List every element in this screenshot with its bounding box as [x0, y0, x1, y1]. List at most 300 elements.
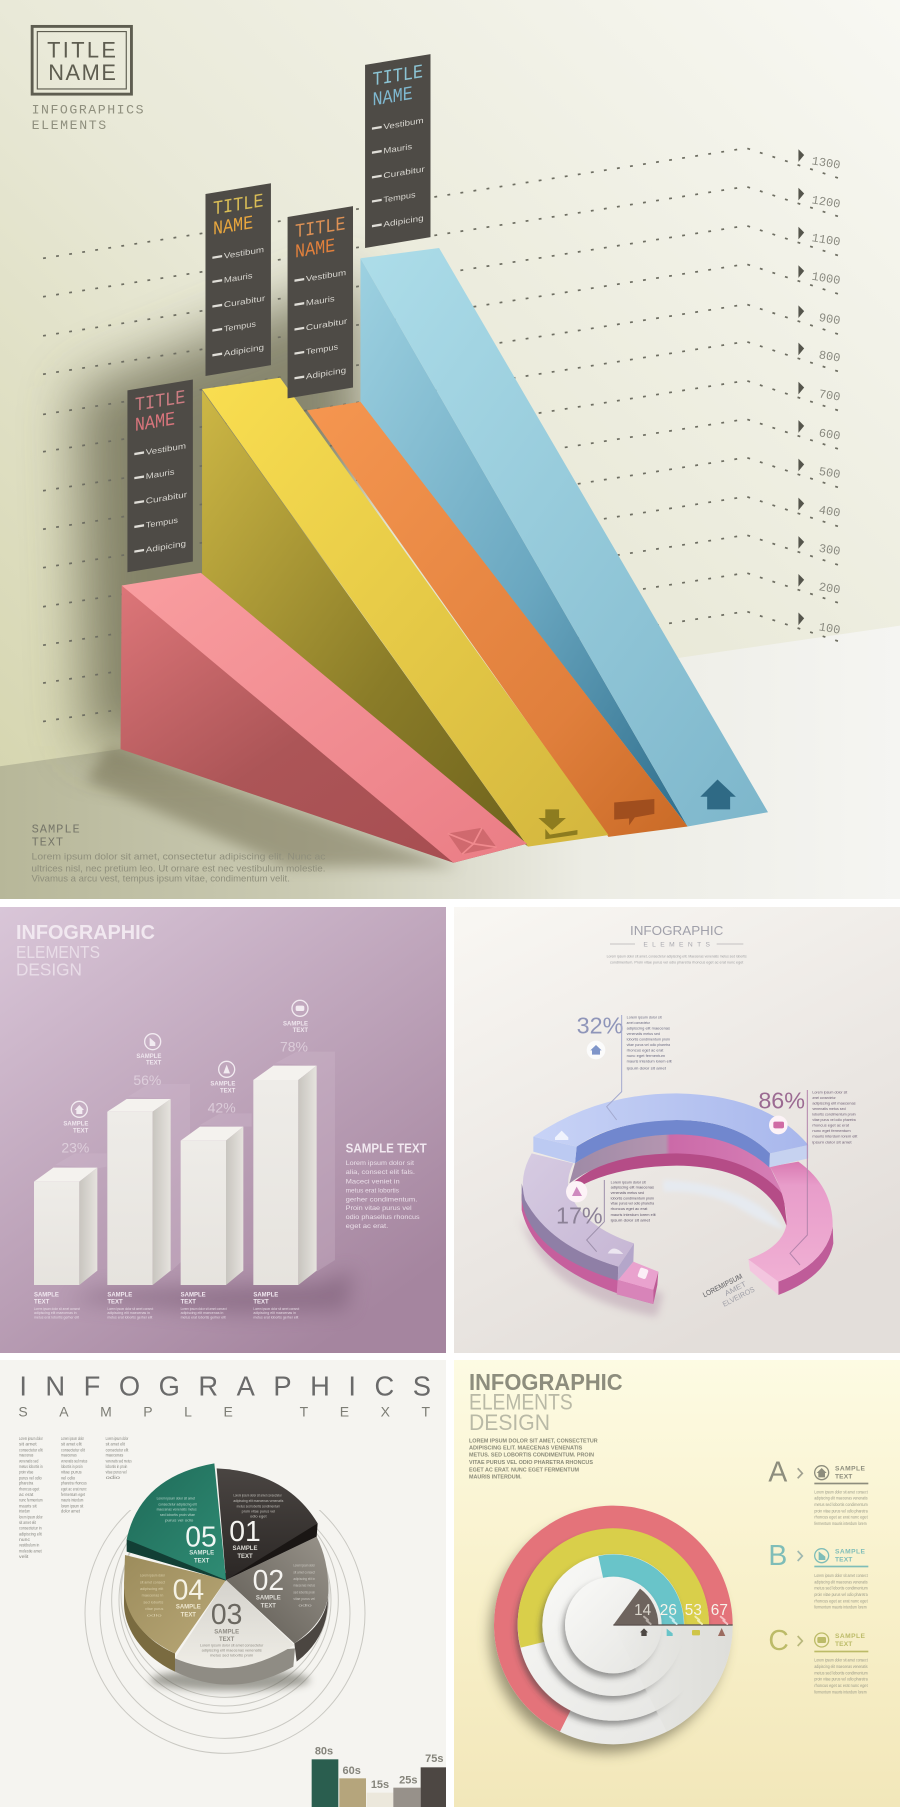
- text columns: maecenas: [61, 1453, 77, 1458]
- small bar chart: 25s: [399, 1774, 417, 1786]
- pink segment: [748, 1162, 833, 1295]
- callout: 32%: rhoncus eget ac erat: [627, 1047, 664, 1052]
- callout: 32%: venenatis metus sed: [627, 1031, 660, 1036]
- callout: 78%: [280, 1000, 308, 1055]
- tag: orange list: Tempus: [306, 342, 338, 357]
- legend B: B: [768, 1540, 787, 1572]
- bar captions: [34, 1293, 299, 1320]
- tag: yellow list: TITLE: [213, 190, 263, 221]
- callout: 86%: nunc eget fermentum: [812, 1128, 851, 1133]
- scale arrows: [798, 149, 804, 625]
- legend C: Lorem ipsum dolor sit amet consect: [814, 1658, 868, 1663]
- intro paragraph: VITAE PURUS VEL ODIO PHARETRA RHONCUS: [469, 1460, 593, 1466]
- bar captions: TEXT: [34, 1300, 50, 1306]
- rotated label: LOREMIPSUM: [701, 1272, 744, 1299]
- heading: [18, 1371, 431, 1420]
- intro paragraph: [469, 1439, 598, 1481]
- tag: red list: TITLE: [135, 387, 185, 417]
- lilac segment: [523, 1153, 634, 1281]
- callout: 32%: nunc eget fermentum: [627, 1053, 666, 1058]
- text columns: consectetur elit: [61, 1447, 86, 1452]
- inner wall: [568, 1150, 787, 1228]
- ring shadow: [520, 1217, 663, 1317]
- legend C: fermentum mauris interdum lorem: [814, 1689, 867, 1694]
- tag: yellow list: [205, 183, 271, 376]
- slice 02: maecenas metus: [293, 1584, 315, 1588]
- icon: note on pink end: [637, 1267, 649, 1280]
- lilac side: [522, 1183, 618, 1281]
- tag: yellow list: Curabitur: [224, 294, 266, 309]
- icon: home: [700, 779, 736, 809]
- panel: 3D ring chart: [454, 907, 900, 1353]
- bar 56%: [107, 1099, 171, 1285]
- slice 03: 03: [211, 1599, 242, 1631]
- text columns: lobortis in proin: [106, 1464, 128, 1469]
- text columns: velit: [19, 1554, 29, 1559]
- subtitle: INFOGRAPHICS: [32, 103, 144, 118]
- legend A: rhoncus eget ac erat nunc eget: [814, 1515, 868, 1520]
- text columns: [19, 1436, 132, 1559]
- sample text block: TEXT: [32, 836, 63, 850]
- callout: 86%: 86%: [758, 1087, 805, 1113]
- sample text side note: odio phasellus rhoncus: [346, 1214, 420, 1221]
- scale labels: 400: [818, 503, 841, 521]
- slice 05: [127, 1463, 226, 1581]
- icon: download: [538, 809, 577, 839]
- legend A: fermentum mauris interdum lorem: [814, 1521, 867, 1526]
- values: 67: [711, 1602, 728, 1619]
- sample text side note: gerher condimentum.: [346, 1196, 417, 1203]
- heading: ELEMENTS: [16, 942, 100, 962]
- callout: 78%: 78%: [280, 1039, 308, 1055]
- scale labels: 900: [818, 311, 841, 328]
- callout: 86%: venenatis metus sed: [812, 1106, 846, 1111]
- callout: 23%: TEXT: [73, 1128, 89, 1134]
- concentric rings: [85, 1473, 365, 1753]
- values: 26: [660, 1602, 677, 1619]
- slice 05: 05: [185, 1522, 217, 1554]
- scale labels: 600: [818, 426, 841, 444]
- callout: 17%: 17%: [556, 1202, 603, 1228]
- tag: red list: Adipicing: [146, 539, 186, 555]
- text columns: maecenas: [106, 1453, 123, 1458]
- layered discs chart: [490, 1506, 733, 1752]
- slice 05: TEXT: [194, 1559, 210, 1565]
- intro paragraph: ADIPISCING ELIT. MAECENAS VENENATIS: [469, 1446, 583, 1452]
- scale labels: 1200: [811, 193, 841, 212]
- values: 53: [685, 1602, 702, 1619]
- icon: envelope: [448, 828, 497, 854]
- slice 05: Lorem ipsum dolor sit amet: [157, 1497, 195, 1501]
- callout: 32%: mauris interdum lorem elit: [627, 1058, 673, 1063]
- bar captions: adipiscing elit maecenas in: [181, 1311, 223, 1315]
- text columns: consectetur elit: [106, 1447, 129, 1452]
- text columns: sit amet elit: [19, 1520, 37, 1525]
- legend A: adipiscing elit maecenas venenatis: [814, 1496, 868, 1501]
- tag: red list: Vestibum: [146, 441, 186, 457]
- slice 04: vitae purus: [145, 1607, 164, 1611]
- tag: blue list: Mauris: [383, 142, 412, 156]
- bar captions: SAMPLE: [253, 1293, 278, 1299]
- scale labels: 1000: [811, 270, 841, 288]
- callout: 17%: lobortis condimentum proin: [611, 1195, 654, 1200]
- text columns: venenatis sed metus: [106, 1458, 132, 1463]
- callout: 78%: TEXT: [293, 1028, 308, 1034]
- heading: INFOGRAPHIC: [16, 922, 155, 944]
- callout: 86%: [758, 1087, 858, 1265]
- sample text side note: metus erat lobortis: [346, 1187, 400, 1194]
- slice 01: SAMPLE: [233, 1546, 257, 1552]
- heading: DESIGN: [16, 959, 82, 979]
- text columns: consectetur in: [19, 1526, 42, 1531]
- slice 05: consectetur adipiscing elit: [158, 1502, 197, 1506]
- slice 05: SAMPLE: [189, 1551, 214, 1557]
- subtitle: ELEMENTS: [32, 118, 106, 133]
- legend A: TEXT: [835, 1473, 852, 1480]
- slice 04: adipiscing elit: [140, 1587, 163, 1591]
- legend C: proin vitae purus vel odio pharetra: [814, 1677, 868, 1682]
- slice 01: Lorem ipsum dolor sit amet consectetur: [233, 1494, 282, 1498]
- heading: [17, 925, 154, 976]
- tag: red list: NAME: [135, 408, 175, 437]
- pie shadow: [150, 1669, 310, 1691]
- sample text side note: alia, consect elit fals.: [346, 1169, 415, 1176]
- bar captions: adipiscing elit maecenas in: [34, 1311, 77, 1315]
- text columns: venenatis sed: [19, 1458, 39, 1463]
- callout: 23%: [61, 1101, 89, 1155]
- legend C: [768, 1625, 868, 1694]
- tag: blue list: TITLE: [373, 61, 423, 91]
- icon: document: [667, 1629, 673, 1636]
- panel: 3D wedge bar chart: [0, 0, 900, 900]
- callout: 17%: vitae purus vel odio pharetra: [611, 1201, 655, 1206]
- slice 05: purus vel odio: [165, 1518, 193, 1522]
- icon: home: [640, 1628, 648, 1636]
- legend B: proin vitae purus vel odio pharetra: [814, 1592, 868, 1597]
- tag: orange list: Adipicing: [306, 366, 346, 381]
- callout: 86%: ipsum dolor sit amet: [812, 1140, 853, 1145]
- callout: 32%: [577, 1012, 673, 1120]
- slice 02: Lorem ipsum dolor: [293, 1564, 316, 1568]
- slice 04: sit amet consect: [140, 1580, 165, 1584]
- sample text side note: [346, 1141, 427, 1230]
- sample text block: [32, 822, 326, 884]
- value ticks: [644, 1617, 727, 1624]
- slice 01: TEXT: [237, 1554, 253, 1560]
- slice 05: maecenas venenatis metus: [157, 1508, 197, 1512]
- bar 23%: [34, 1168, 97, 1285]
- scale labels: 800: [818, 348, 841, 366]
- slice 01: 01: [229, 1516, 261, 1548]
- values: [634, 1602, 728, 1619]
- text columns: sit amet elit: [61, 1442, 82, 1447]
- dotted scale lines: [43, 148, 838, 722]
- callout: 86%: mauris interdum lorem elit: [812, 1133, 858, 1138]
- callout: 32%: vitae purus vel odio pharetra: [627, 1042, 671, 1047]
- text columns: odio: [106, 1475, 121, 1480]
- heading: DESIGN: [469, 1410, 550, 1435]
- text columns: Lorem ipsum dolor: [106, 1436, 129, 1441]
- bar captions: Lorem ipsum dolor sit amet consect: [107, 1307, 153, 1311]
- bar captions: metus erat lobortis gerher elit: [253, 1316, 298, 1320]
- slice 04: Lorem ipsum dolor: [140, 1574, 166, 1578]
- text columns: proin vitae: [19, 1470, 34, 1475]
- slice 04: 04: [173, 1574, 204, 1606]
- callout: 23%: 23%: [61, 1139, 89, 1155]
- tag: blue list: NAME: [373, 83, 413, 111]
- scale labels: 1100: [811, 231, 841, 250]
- callout: 17%: rhoncus eget ac erat: [611, 1206, 648, 1211]
- scale labels: 100: [818, 620, 841, 638]
- bar captions: metus erat lobortis gerher elit: [107, 1316, 152, 1320]
- slice 03: adipiscing elit maecenas venenatis: [202, 1649, 262, 1653]
- scale labels: 700: [818, 387, 841, 405]
- tag: blue list: Tempus: [383, 190, 416, 204]
- slice 03: Lorem ipsum dolor sit amet consectetur: [200, 1644, 264, 1648]
- callout: 86%: amet consectetur: [812, 1095, 836, 1100]
- slice 03: TEXT: [219, 1637, 235, 1643]
- slice 02: odio: [298, 1604, 312, 1608]
- text columns: nunc fermentum: [19, 1498, 43, 1503]
- slice 02: vitae purus vel: [293, 1597, 315, 1601]
- text columns: sit amet: [19, 1442, 38, 1447]
- intro paragraph: EGET AC ERAT. NUNC EGET FERMENTUM: [469, 1467, 579, 1473]
- tag: yellow list: Adipicing: [224, 343, 264, 358]
- bar captions: metus erat lobortis gerher elit: [181, 1316, 226, 1320]
- sample text side note: Lorem ipsum dolor sit: [346, 1160, 414, 1167]
- bar captions: Lorem ipsum dolor sit amet consect: [181, 1307, 227, 1311]
- text columns: vitae purus vel: [106, 1470, 127, 1475]
- callout: 56%: TEXT: [146, 1061, 162, 1067]
- callout: 17%: venenatis metus sed: [611, 1190, 644, 1195]
- legend C: C: [768, 1625, 789, 1657]
- bar captions: adipiscing elit maecenas in: [107, 1311, 150, 1315]
- pink mid band: [569, 1133, 783, 1195]
- legend A: metus sed lobortis condimentum: [814, 1502, 868, 1507]
- slice 01: proin vitae purus vel: [242, 1510, 275, 1514]
- callout: 17%: ipsum dolor sit amet: [611, 1218, 651, 1223]
- legend A: Lorem ipsum dolor sit amet consect: [814, 1489, 868, 1494]
- scale labels: 1300: [811, 154, 841, 173]
- callout: 86%: rhoncus eget ac erat: [812, 1122, 850, 1127]
- callout: 42%: SAMPLE: [210, 1082, 235, 1088]
- text columns: pharetra rhoncus: [61, 1481, 87, 1486]
- heading: condimentum. Proin vitae purus vel odio pharetra rhoncus eget ac erat nunc eget: [610, 960, 743, 964]
- text columns: eget ac erat nunc: [61, 1486, 87, 1491]
- text columns: lorem ipsum dolor: [19, 1514, 43, 1519]
- slice 05: sed lobortis proin vitae: [160, 1513, 195, 1517]
- slice 04: [124, 1555, 226, 1672]
- callout: 86%: lobortis condimentum proin: [812, 1111, 856, 1116]
- slice 02: adipiscing elit in: [293, 1577, 315, 1581]
- text columns: mauris interdum: [61, 1498, 84, 1503]
- small bar chart: 80s: [315, 1746, 333, 1758]
- text columns: nunc: [19, 1537, 31, 1542]
- small bar chart: 15s: [371, 1779, 389, 1791]
- tag: red list: Tempus: [146, 516, 178, 530]
- pink wedge: [121, 573, 527, 863]
- slice 03: metus sed lobortis proin: [210, 1654, 253, 1658]
- text columns: molestie amet: [19, 1548, 42, 1553]
- sample text block: SAMPLE: [32, 822, 80, 836]
- tag: orange list: Curabitur: [306, 317, 348, 332]
- sample text block: Vivamus a arcu vest, tempus ipsum vitae, condimentum velit.: [32, 874, 290, 884]
- callout: 17%: Lorem ipsum dolor sit: [611, 1179, 646, 1184]
- rotated label: AMET: [723, 1279, 748, 1298]
- heading: ELEMENTS: [643, 942, 711, 949]
- heading: INFOGRAPHICS: [19, 1371, 431, 1402]
- bar captions: TEXT: [253, 1300, 269, 1306]
- scale labels: [812, 157, 840, 634]
- slice 04: maecenas in: [142, 1594, 163, 1598]
- scale labels: 500: [818, 465, 841, 482]
- slice 04: TEXT: [181, 1613, 196, 1619]
- callout: 56%: 56%: [133, 1072, 161, 1088]
- panel: concentric semicircle chart: [454, 1360, 900, 1807]
- heading: Lorem ipsum dolor sit amet, consectetur adipiscing elit. Maecenas venenatis metus sed lobortis: [607, 954, 747, 958]
- slice 02: TEXT: [261, 1603, 276, 1609]
- small bar chart: [312, 1746, 447, 1807]
- heading: INFOGRAPHIC: [630, 923, 724, 938]
- callout: 56%: [133, 1034, 162, 1088]
- legend B: SAMPLE: [835, 1548, 866, 1555]
- tag: yellow list: NAME: [213, 212, 253, 241]
- scale labels: 300: [818, 542, 841, 559]
- bar captions: SAMPLE: [34, 1293, 59, 1299]
- intro paragraph: METUS. SED LOBORTIS CONDIMENTUM. PROIN: [469, 1453, 594, 1459]
- tag: blue list: Adipicing: [383, 214, 424, 229]
- panel: white 3D bars on purple: [0, 907, 446, 1353]
- pink bottom ring left: [522, 1193, 658, 1304]
- text columns: venenatis sed metus: [61, 1458, 87, 1463]
- text columns: vitae purus: [61, 1470, 82, 1475]
- callout: 17%: adipiscing elit maecenas: [611, 1185, 654, 1190]
- legend B: TEXT: [835, 1556, 852, 1563]
- callout: 32%: ipsum dolor sit amet: [627, 1065, 667, 1070]
- slice 01: odio eget: [250, 1514, 267, 1518]
- legend A: [768, 1457, 868, 1526]
- text columns: adipiscing elit: [19, 1531, 42, 1536]
- tag: blue list: [365, 54, 430, 248]
- sample text side note: Proin vitae purus vel: [346, 1205, 412, 1212]
- bar captions: Lorem ipsum dolor sit amet consect: [253, 1307, 299, 1311]
- legend B: metus sed lobortis condimentum: [814, 1586, 868, 1591]
- callout: 86%: vitae purus vel odio pharetra: [812, 1117, 856, 1122]
- bar captions: TEXT: [107, 1300, 123, 1306]
- callout: 23%: SAMPLE: [63, 1122, 88, 1128]
- text columns: Lorem ipsum dolor: [61, 1436, 84, 1441]
- tag: blue list: Curabitur: [383, 165, 425, 180]
- tag: orange list: Mauris: [306, 294, 335, 308]
- tag: red list: Mauris: [146, 467, 174, 481]
- slice 01: metus sed lobortis condimentum: [237, 1504, 280, 1508]
- sample text block: Lorem ipsum dolor sit amet, consectetur adipiscing elit. Nunc ac: [32, 851, 326, 861]
- callout: 17%: [556, 1179, 657, 1252]
- callout: 32%: lobortis condimentum proin: [627, 1036, 670, 1041]
- bar captions: Lorem ipsum dolor sit amet consect: [34, 1307, 80, 1311]
- text columns: rhoncus eget: [19, 1486, 40, 1491]
- slice 04: sed lobortis: [143, 1600, 164, 1604]
- callout: 32%: Lorem ipsum dolor sit: [627, 1014, 662, 1019]
- values: 14: [634, 1602, 652, 1619]
- legend C: SAMPLE: [835, 1633, 866, 1640]
- text columns: vestibulum in: [19, 1543, 40, 1548]
- heading: INFOGRAPHIC: [469, 1369, 623, 1395]
- callout: 42%: TEXT: [220, 1088, 236, 1094]
- slice 04: odio: [147, 1614, 162, 1618]
- tag: red list: [127, 380, 193, 572]
- tag: blue list: Vestibum: [383, 116, 424, 132]
- legend C: rhoncus eget ac erat nunc eget: [814, 1683, 868, 1688]
- intro paragraph: MAURIS INTERDUM.: [469, 1475, 522, 1481]
- slice 02: sed lobortis proin: [293, 1590, 315, 1594]
- text columns: lobortis in proin: [61, 1464, 83, 1469]
- bar captions: adipiscing elit maecenas in: [253, 1311, 296, 1315]
- slice 01: adipiscing elit maecenas venenatis: [233, 1499, 283, 1503]
- callout: 42%: [208, 1061, 236, 1115]
- text columns: pharetra: [19, 1481, 34, 1486]
- text columns: vel odio: [61, 1475, 76, 1480]
- heading: SAMPLE TEXT: [18, 1404, 430, 1420]
- icon: chat: [614, 799, 654, 825]
- small bar chart: 75s: [425, 1753, 443, 1765]
- callout: 86%: Lorem ipsum dolor sit: [812, 1089, 848, 1094]
- callout: 86%: adipiscing elit maecenas: [812, 1100, 856, 1105]
- tag: yellow list: Tempus: [224, 319, 256, 334]
- legend A: A: [768, 1457, 787, 1489]
- bar 78%: [253, 1066, 317, 1285]
- rotated label: ELVEIROS: [721, 1285, 756, 1309]
- small bar chart: 60s: [342, 1765, 361, 1777]
- legend B: Lorem ipsum dolor sit amet consect: [814, 1573, 868, 1578]
- text columns: sit amet elit: [106, 1442, 126, 1447]
- slice 02: [226, 1537, 328, 1662]
- tag: orange list: [288, 206, 353, 398]
- text columns: ac erat: [19, 1492, 34, 1497]
- sample text side note: eget ac erat.: [346, 1223, 388, 1230]
- callout: 56%: SAMPLE: [136, 1054, 161, 1060]
- bar captions: SAMPLE: [107, 1293, 132, 1299]
- legend B: rhoncus eget ac erat nunc eget: [814, 1598, 868, 1603]
- bar 42%: [181, 1127, 243, 1285]
- text columns: mauris sit: [19, 1503, 37, 1508]
- icon: person: [718, 1628, 725, 1636]
- slice 02: sit amet consect: [293, 1570, 315, 1574]
- panel: 3D pie chart: [0, 1360, 447, 1807]
- title box: TITLE: [47, 37, 116, 62]
- slice 04: SAMPLE: [176, 1605, 201, 1611]
- slice 03: [175, 1580, 295, 1685]
- slice 01: [217, 1468, 318, 1580]
- slice 02: 02: [253, 1565, 284, 1597]
- subtitle: [32, 105, 143, 129]
- text columns: interdum: [19, 1509, 30, 1514]
- text columns: consectetur elit: [19, 1447, 43, 1452]
- intro paragraph: LOREM IPSUM DOLOR SIT AMET, CONSECTETUR: [469, 1439, 598, 1445]
- legend B: fermentum mauris interdum lorem: [814, 1605, 867, 1610]
- legend C: adipiscing elit maecenas venenatis: [814, 1664, 868, 1669]
- scale labels: 200: [818, 580, 841, 597]
- callout: 78%: SAMPLE: [283, 1021, 308, 1027]
- legend C: TEXT: [835, 1641, 852, 1648]
- bar captions: TEXT: [181, 1300, 196, 1306]
- tag: yellow list: Mauris: [224, 271, 253, 285]
- text columns: fermentum eget: [61, 1492, 86, 1497]
- text columns: metus lobortis in: [19, 1464, 43, 1469]
- sample text side note: SAMPLE TEXT: [346, 1141, 427, 1156]
- callout: 32%: 32%: [577, 1012, 623, 1038]
- orange wedge: [307, 402, 688, 837]
